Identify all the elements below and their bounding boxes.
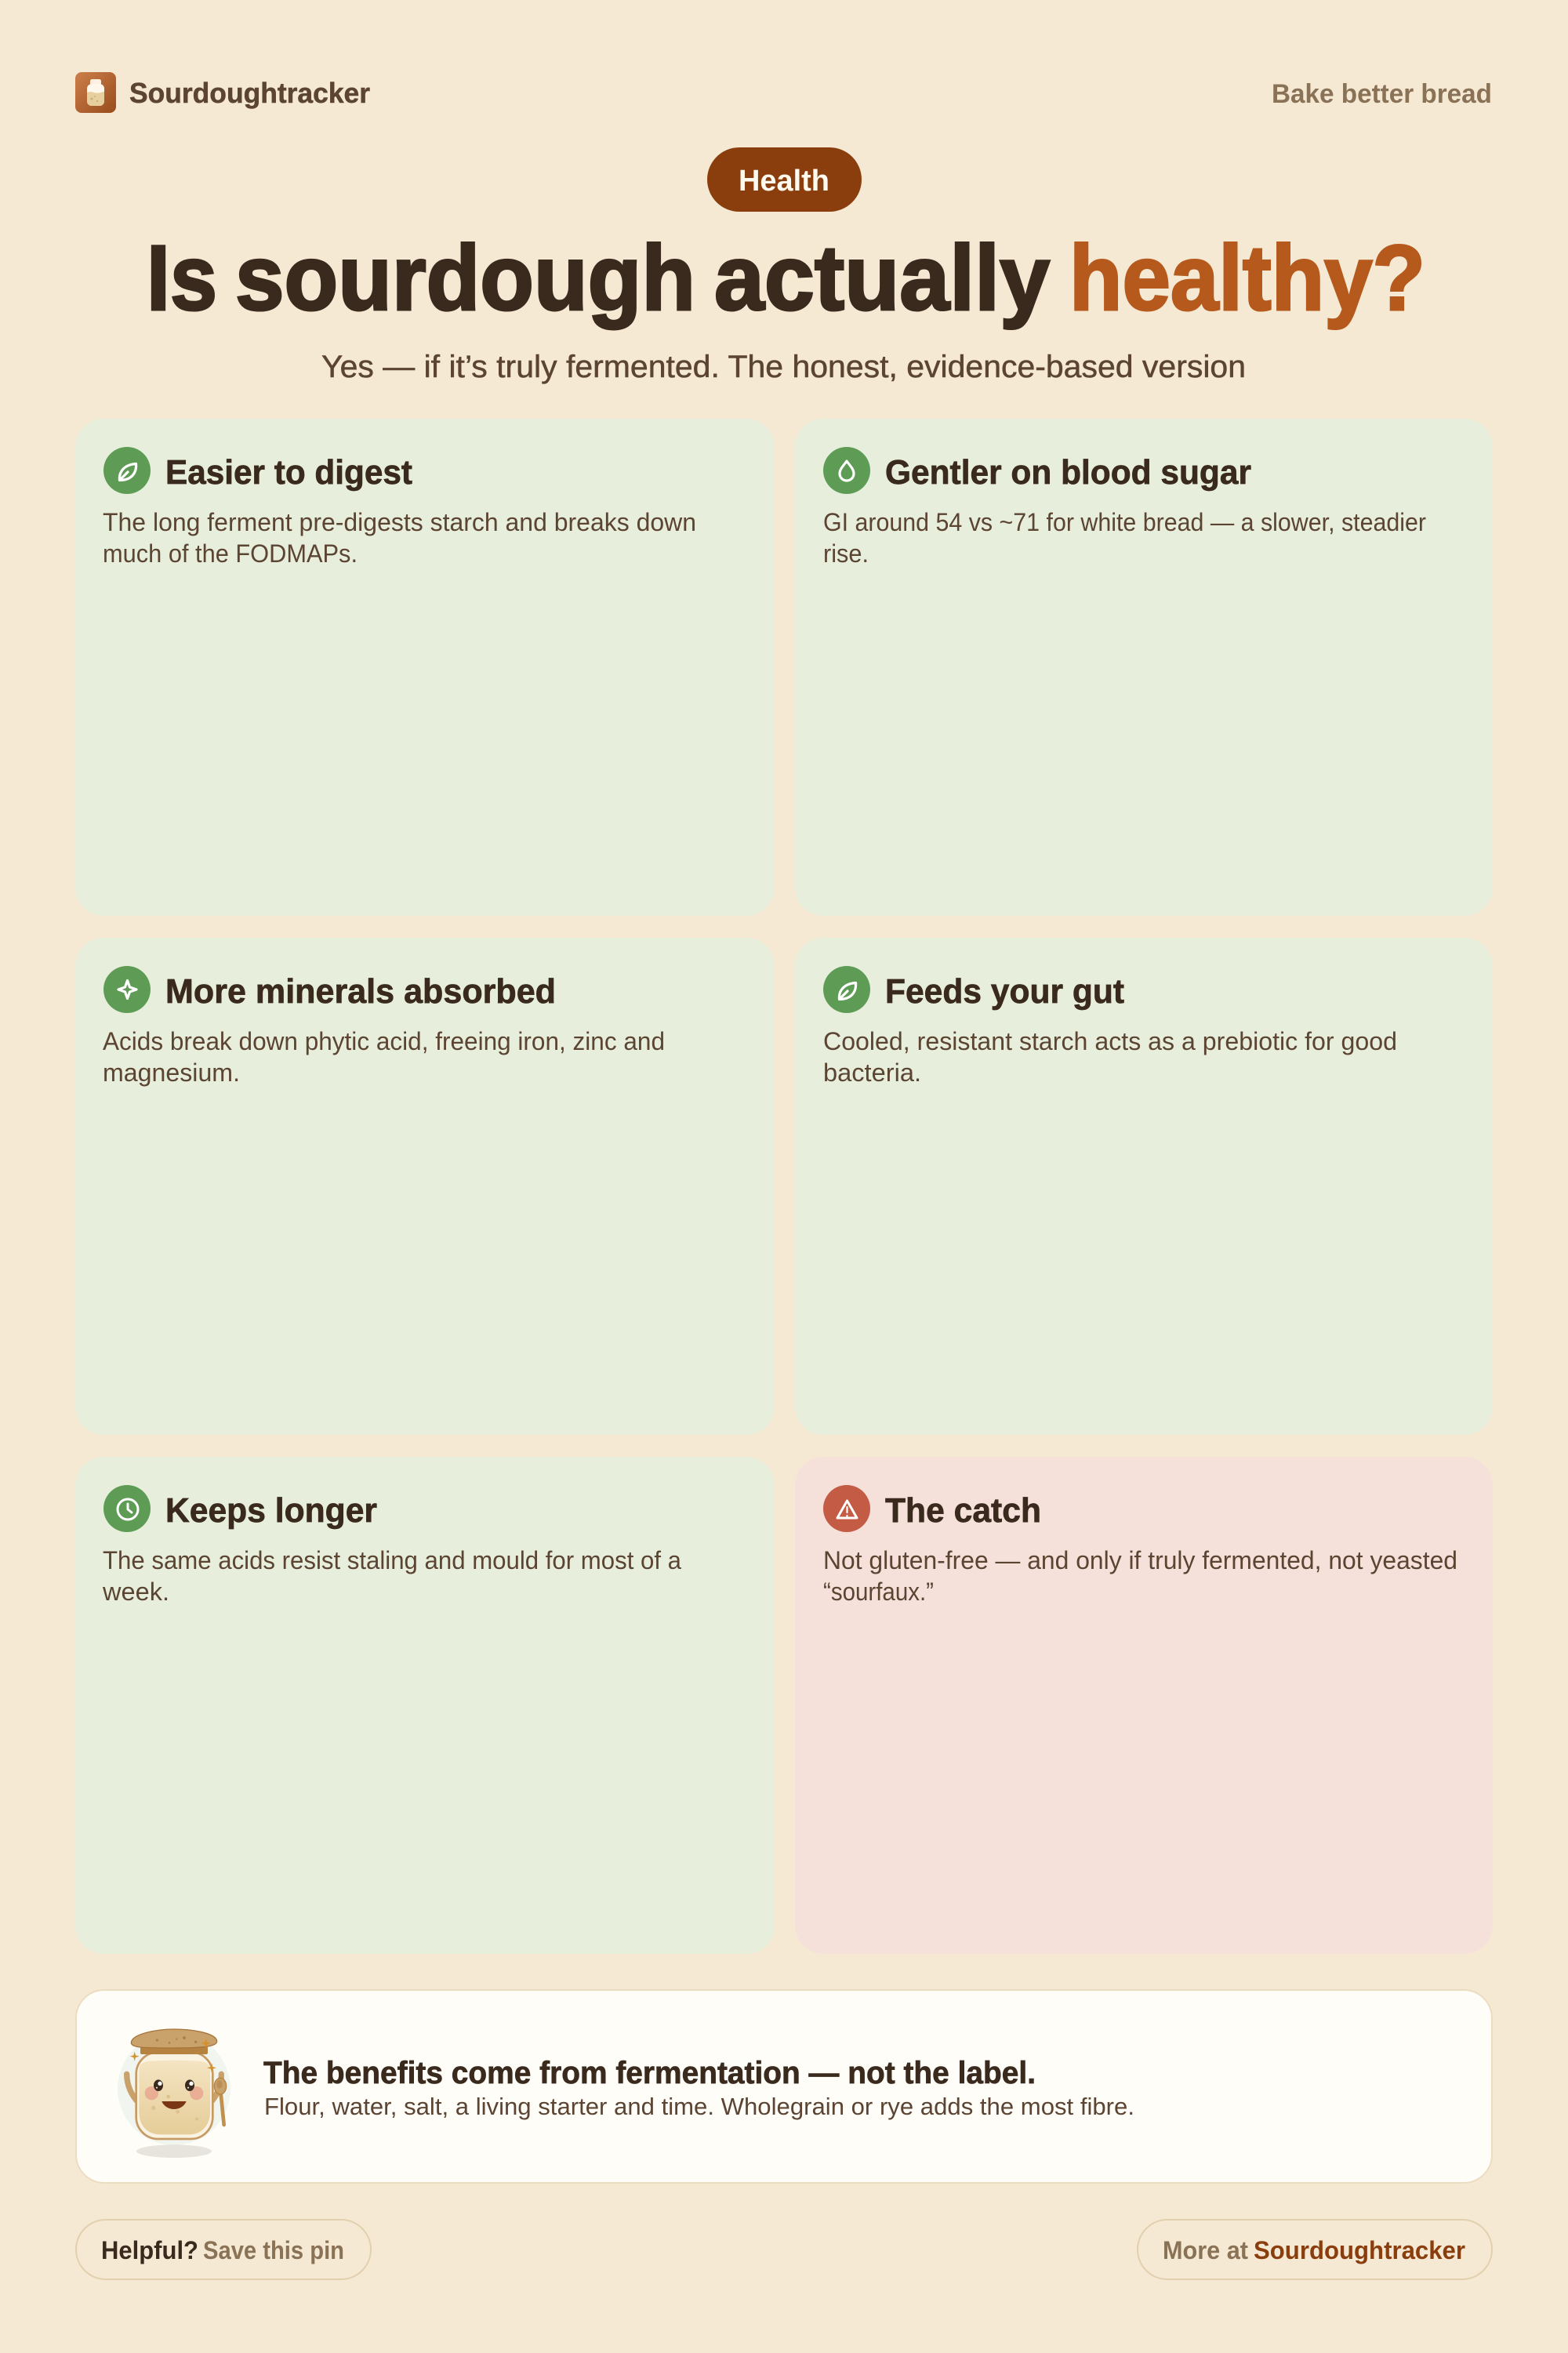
footer pill: more: Sourdoughtracker: [1254, 2236, 1465, 2264]
description: “sourfaux.”: [823, 1578, 934, 1606]
mascot: jar character: [118, 2029, 230, 2158]
description: week.: [102, 1578, 169, 1606]
icon: starter jar logo: [75, 72, 116, 113]
footer pill: more: More at: [1163, 2236, 1248, 2264]
panel: feeds your gut: [795, 938, 1493, 1435]
title: healthy?: [1069, 227, 1425, 330]
icon: sparkle: [103, 966, 151, 1013]
heading: Gentler on blood sugar: [885, 453, 1251, 492]
banner heading: The benefits come from fermentation — not the label.: [263, 2056, 1036, 2090]
heading: The catch: [885, 1491, 1041, 1530]
description: Cooled, resistant starch acts as a prebiotic for good: [823, 1027, 1397, 1055]
title: actually: [714, 227, 1050, 330]
category pill: [707, 147, 862, 212]
panel: keeps longer: [75, 1457, 775, 1954]
panel: the catch: [795, 1457, 1493, 1954]
heading: Keeps longer: [165, 1491, 377, 1530]
description: [823, 1546, 1457, 1606]
description: Acids break down phytic acid, freeing iron, zinc and: [103, 1027, 665, 1055]
footer pill: more: [1138, 2220, 1492, 2279]
footer pill: save: [76, 2220, 371, 2279]
footer pill: save: Helpful?: [101, 2236, 198, 2264]
panel: gentler on blood sugar: [795, 419, 1493, 916]
panel: easier to digest: [75, 419, 775, 916]
footer pill: save: Save this pin: [203, 2236, 344, 2264]
banner: [76, 1990, 1492, 2183]
description: [103, 1027, 665, 1087]
panel: more minerals absorbed: [75, 938, 775, 1435]
title: sourdough: [235, 227, 695, 330]
description: The long ferment pre-digests starch and breaks down: [103, 508, 696, 536]
tagline: Bake better bread: [1272, 79, 1492, 109]
description: GI around 54 vs ~71 for white bread — a slower, steadier: [823, 508, 1426, 536]
banner text: Flour, water, salt, a living starter and time. Wholegrain or rye adds the most fibre.: [264, 2093, 1134, 2120]
description: [823, 1027, 1397, 1087]
icon: clock: [103, 1485, 151, 1532]
brand name: Sourdoughtracker: [129, 77, 370, 109]
description: [103, 508, 696, 568]
heading: More minerals absorbed: [165, 972, 556, 1011]
description: much of the FODMAPs.: [103, 539, 358, 568]
category pill: Health: [739, 165, 829, 198]
description: rise.: [823, 539, 869, 568]
icon: water drop: [823, 447, 870, 494]
title: Is: [147, 227, 217, 330]
header brand: [75, 72, 370, 113]
icon: warning triangle: [823, 1485, 870, 1532]
icon: leaf: [823, 966, 870, 1013]
heading: Feeds your gut: [885, 972, 1124, 1011]
title: [147, 227, 1425, 330]
icon: leaf: [103, 447, 151, 494]
description: Not gluten-free — and only if truly fermented, not yeasted: [823, 1546, 1457, 1574]
heading: Easier to digest: [165, 453, 412, 492]
description: [102, 1546, 681, 1606]
description: magnesium.: [103, 1058, 240, 1087]
description: bacteria.: [823, 1058, 921, 1087]
description: The same acids resist staling and mould for most of a: [103, 1546, 681, 1574]
subtitle: Yes — if it’s truly fermented. The honest, evidence-based version: [321, 350, 1246, 384]
description: [823, 508, 1426, 568]
